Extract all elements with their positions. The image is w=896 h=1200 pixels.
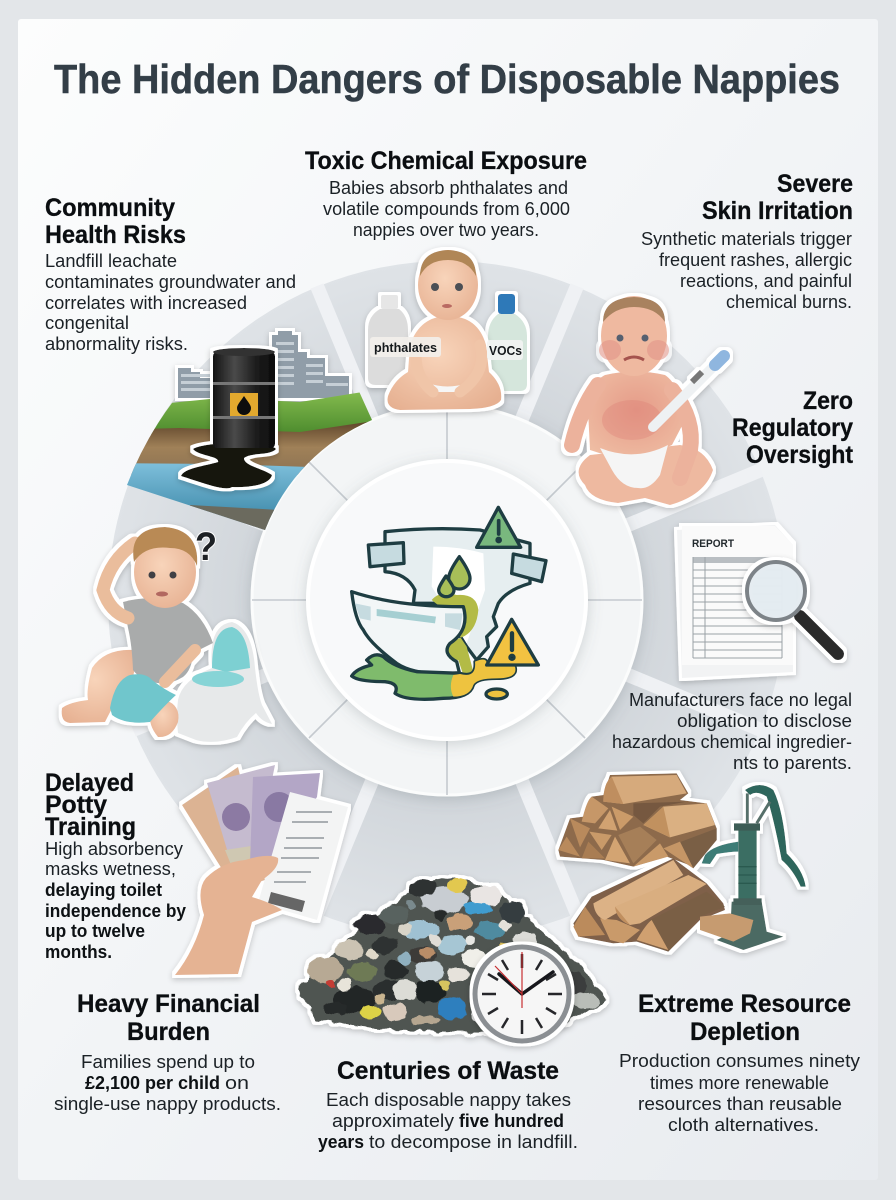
note: purple second (250, 773, 320, 863)
drops (449, 557, 470, 589)
text: delayed potty training: masks wetness, (45, 858, 176, 879)
baby (388, 250, 501, 410)
rash (602, 400, 662, 440)
lower log pile (573, 858, 725, 952)
text: severe skin irritation: chemical burns. (726, 291, 852, 312)
text: community health risks (45, 194, 296, 354)
text: delayed potty training: Potty (45, 791, 107, 819)
hand (175, 856, 282, 975)
label: VOCs (487, 340, 523, 360)
arms (572, 385, 598, 445)
nappy front (352, 592, 465, 674)
text: severe skin irritation: Severe (777, 170, 853, 198)
tab left (368, 543, 404, 567)
text: heavy financial burden: Families spend up to (81, 1051, 255, 1072)
text: extreme resource depletion: times more renewable (650, 1072, 829, 1093)
warning triangle: green (477, 507, 521, 547)
text: heavy financial burden (54, 990, 281, 1114)
torso (588, 372, 685, 456)
text: heavy financial burden: £2,100 per child (85, 1072, 220, 1093)
text: centuries of waste: approximately (332, 1110, 455, 1131)
illustration: baby with rash and thermometer (572, 296, 724, 505)
text: severe skin irritation: Skin Irritation (702, 197, 853, 225)
head (134, 536, 196, 608)
illustration: hand holding banknotes and receipt (175, 765, 348, 975)
text: zero regulatory oversight body (612, 689, 852, 773)
text: toxic chemical exposure: volatile compounds from 6,000 (323, 198, 570, 219)
text: toxic chemical exposure: nappies over two years. (353, 219, 539, 240)
text: centuries of waste: years (318, 1131, 364, 1152)
clock (475, 947, 569, 1041)
text: delayed potty training: delaying toilet (45, 879, 162, 900)
text: severe skin irritation (641, 170, 853, 312)
text: zero regulatory oversight body: Manufacturers face no legal (629, 689, 852, 710)
raised arm (103, 543, 135, 618)
text: zero regulatory oversight body: hazardous chemical ingredier- (612, 731, 852, 752)
illustration: firewood and water pump (558, 773, 806, 952)
text: community health risks: contaminates groundwater and (45, 271, 296, 292)
illustration: waste pile with clock (297, 877, 607, 1041)
bottle: VOCs (488, 294, 527, 391)
puddle (352, 655, 515, 699)
text: heavy financial burden: single-use nappy products. (54, 1093, 281, 1114)
upper log pile (558, 773, 717, 867)
text: centuries of waste: Each disposable nappy takes (326, 1089, 571, 1110)
diaper (600, 445, 668, 488)
label: phthalates: phthalates (374, 340, 437, 355)
potty back rest (212, 627, 250, 672)
text: extreme resource depletion: Production consumes ninety (619, 1050, 861, 1071)
text: community health risks: congenital (45, 312, 129, 333)
text: community health risks: Community (45, 194, 175, 222)
illustration: toddler on potty (62, 527, 272, 742)
text: centuries of waste: Centuries of Waste (337, 1057, 559, 1085)
receipt (258, 792, 348, 920)
illustration: baby with chemical bottles (368, 250, 527, 410)
text: severe skin irritation: frequent rashes, allergic (659, 249, 852, 270)
thermometer (653, 363, 717, 427)
text: centuries of waste: to decompose in landfill. (369, 1131, 578, 1152)
icon: leaking nappy with warnings (352, 507, 546, 699)
label: phthalates (370, 337, 441, 357)
potty shell (177, 622, 272, 742)
icon: question mark: ? (195, 525, 217, 569)
magnifying glass (747, 562, 838, 654)
text: heavy financial burden: on (225, 1072, 249, 1093)
text: severe skin irritation: Synthetic materials trigger (641, 228, 852, 249)
text: heavy financial burden: Heavy Financial (77, 990, 260, 1018)
head (601, 296, 667, 376)
text: zero regulatory oversight body: nts to parents. (733, 752, 852, 773)
report pages: REPORT (692, 538, 734, 550)
nappy back (385, 529, 530, 660)
shirt (123, 598, 213, 683)
potty front (110, 674, 176, 723)
forearm (165, 650, 195, 682)
bottle: phthalates (368, 295, 408, 385)
text: centuries of waste: five hundred (459, 1110, 564, 1131)
text: extreme resource depletion: resources than reusable (638, 1093, 842, 1114)
report pages (677, 525, 793, 678)
potty opening (192, 671, 244, 687)
text: severe skin irritation: reactions, and painful (680, 270, 852, 291)
text: centuries of waste (318, 1057, 578, 1152)
text: community health risks: abnormality risks. (45, 333, 188, 354)
text: zero regulatory oversight body: obligation to disclose (677, 710, 852, 731)
city skyline (178, 331, 349, 398)
text: toxic chemical exposure: Toxic Chemical Exposure (305, 147, 587, 175)
text: community health risks: Health Risks (45, 221, 186, 249)
text: community health risks: Landfill leachate (45, 250, 177, 271)
illustration: landfill wedge with city and oil barrel (127, 328, 372, 530)
centre hub: ring, spokes and leaking nappy icon (252, 405, 642, 795)
text: extreme resource depletion: Depletion (690, 1018, 800, 1046)
tab right (512, 554, 546, 582)
title: The Hidden Dangers of Disposable Nappies (54, 56, 840, 102)
stain (432, 593, 478, 676)
text: extreme resource depletion (619, 990, 861, 1135)
text: delayed potty training: months. (45, 941, 112, 962)
heading: zero regulatory oversight: Regulatory (732, 414, 853, 442)
heading: zero regulatory oversight: Zero (803, 387, 853, 415)
text: heavy financial burden: Burden (127, 1018, 210, 1046)
text: delayed potty training: Training (45, 813, 136, 841)
text: toxic chemical exposure: Babies absorb phthalates and (329, 177, 568, 198)
text: delayed potty training (45, 769, 187, 962)
waste pile (297, 877, 607, 1033)
note: purple (207, 765, 275, 883)
warning triangle: yellow (487, 619, 538, 665)
inner lining (432, 547, 485, 643)
legs (579, 445, 713, 505)
wheel: eight grey sectors (108, 261, 786, 939)
text: community health risks: correlates with increased (45, 292, 247, 313)
text: delayed potty training: Delayed (45, 769, 134, 797)
heading: zero regulatory oversight: Oversight (746, 441, 854, 469)
leg and foot (62, 650, 135, 723)
text: delayed potty training: up to twelve (45, 920, 145, 941)
second foot (150, 700, 178, 737)
heading: zero regulatory oversight (732, 387, 854, 469)
text: extreme resource depletion: Extreme Resource (638, 990, 851, 1018)
illustration: report and magnifying glass (677, 525, 838, 678)
text: delayed potty training: independence by (45, 900, 187, 921)
text: delayed potty training: High absorbency (45, 838, 184, 859)
text: extreme resource depletion: cloth alternatives. (668, 1114, 819, 1135)
text: toxic chemical exposure (305, 147, 587, 240)
ground layers (127, 392, 372, 530)
label: VOCs: VOCs (489, 343, 522, 358)
oil barrel and spill (181, 348, 276, 488)
water pump (717, 902, 783, 950)
note: orange (182, 767, 265, 890)
